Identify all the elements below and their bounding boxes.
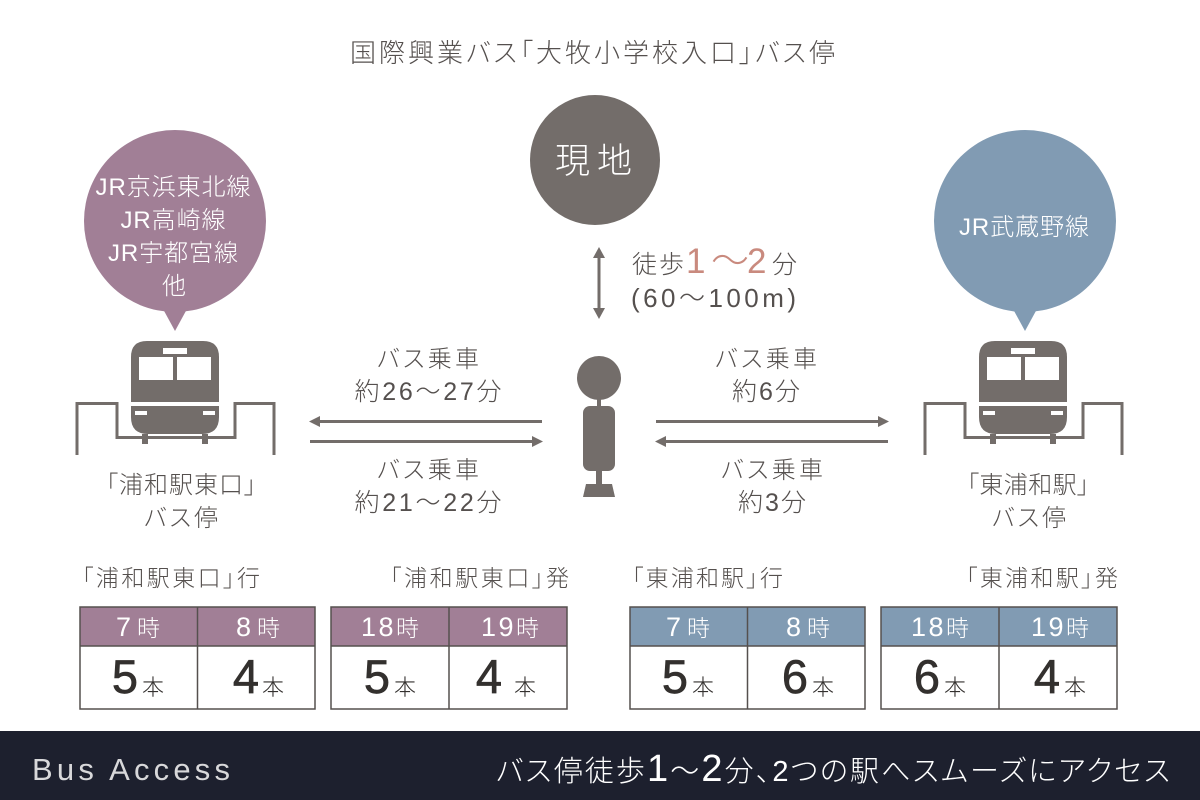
- walking time: ～: [711, 241, 749, 283]
- table 2: 19時: [481, 612, 539, 642]
- footer band: [0, 731, 1200, 800]
- walking time: 2: [747, 242, 766, 281]
- walking time: [631, 241, 797, 313]
- right bus ride bottom label: 約3分: [738, 489, 806, 517]
- walking time: 1: [686, 242, 705, 281]
- right station bubble: [934, 130, 1116, 331]
- table heading: 2: 「浦和駅東口」発: [390, 565, 569, 591]
- right stop name: バス停: [992, 505, 1066, 532]
- table 2: 本: [394, 675, 416, 700]
- left stop name: バス停: [144, 505, 218, 532]
- current location circle: 現地: [555, 142, 632, 181]
- table 3: 7 時: [666, 612, 710, 642]
- table 1: 本: [142, 675, 164, 700]
- right station bubble: JR武蔵野線: [959, 214, 1089, 241]
- right stop name: 「東浦和駅」: [967, 472, 1089, 499]
- table 3: [630, 607, 865, 709]
- table heading: 4: 「東浦和駅」発: [966, 565, 1118, 591]
- right bus ride top label: バス乗車: [715, 346, 817, 373]
- table 3: 本: [812, 675, 834, 700]
- walking time: (60～100m): [631, 283, 796, 313]
- left bus ride bottom label: 約21～22分: [354, 489, 502, 517]
- right arrows: [655, 416, 889, 447]
- table 3: 6: [782, 650, 808, 703]
- table 4: 19時: [1031, 612, 1089, 642]
- title: 国際興業バス「大牧小学校入口」バス停: [350, 38, 835, 68]
- table 3: 5: [662, 650, 688, 703]
- left station bubble: 他: [162, 273, 186, 300]
- table 4: 4: [1034, 650, 1060, 703]
- table 2: 5: [364, 650, 390, 703]
- footer label: Bus Access: [32, 752, 230, 787]
- left train icon: [77, 341, 274, 455]
- table 1: 4: [233, 650, 259, 703]
- table 4: 本: [1064, 675, 1086, 700]
- footer tagline: バス停徒歩1～2分、2つの駅へスムーズにアクセス: [496, 748, 1170, 790]
- right bus ride bottom label: [721, 457, 823, 517]
- table 4: [881, 607, 1117, 709]
- left station bubble: JR宇都宮線: [108, 240, 238, 267]
- walking time: 分: [772, 251, 797, 279]
- bus stop icon: [577, 356, 621, 497]
- table 2: 18時: [361, 612, 419, 642]
- left bus ride top label: [354, 346, 502, 406]
- right train icon: [925, 341, 1122, 455]
- table heading: 1: 「浦和駅東口」行: [82, 565, 260, 591]
- left bus ride bottom label: [354, 457, 502, 517]
- left station bubble: [84, 130, 266, 331]
- table 3: 本: [692, 675, 714, 700]
- table 4: 本: [944, 675, 966, 700]
- walking time: 徒歩: [632, 251, 684, 279]
- table 2: 4: [476, 650, 502, 703]
- left stop name: 「浦和駅東口」: [106, 472, 256, 499]
- table heading: 3: 「東浦和駅」行: [632, 565, 783, 591]
- right bus ride bottom label: バス乗車: [721, 457, 823, 484]
- left bus ride top label: 約26～27分: [354, 378, 502, 406]
- left station bubble: JR高崎線: [120, 207, 226, 234]
- right bus ride top label: [715, 346, 817, 406]
- table 1: 5: [112, 650, 138, 703]
- left arrows: [309, 416, 543, 447]
- table 1: 8 時: [236, 612, 280, 642]
- table 2: [331, 607, 567, 709]
- right bus ride top label: 約6分: [732, 378, 800, 406]
- left station bubble: JR京浜東北線: [96, 174, 250, 201]
- table 1: 本: [262, 675, 284, 700]
- left stop name: [106, 472, 256, 532]
- table 1: 7 時: [116, 612, 160, 642]
- current location circle: [530, 95, 660, 225]
- table 4: 18時: [911, 612, 969, 642]
- left bus ride top label: バス乗車: [377, 346, 479, 373]
- table 1: [80, 607, 315, 709]
- right stop name: [967, 472, 1089, 532]
- left bus ride bottom label: バス乗車: [377, 457, 479, 484]
- table 4: 6: [914, 650, 940, 703]
- table 3: 8 時: [786, 612, 830, 642]
- walking arrow: [593, 247, 605, 319]
- table 2: 本: [514, 675, 536, 700]
